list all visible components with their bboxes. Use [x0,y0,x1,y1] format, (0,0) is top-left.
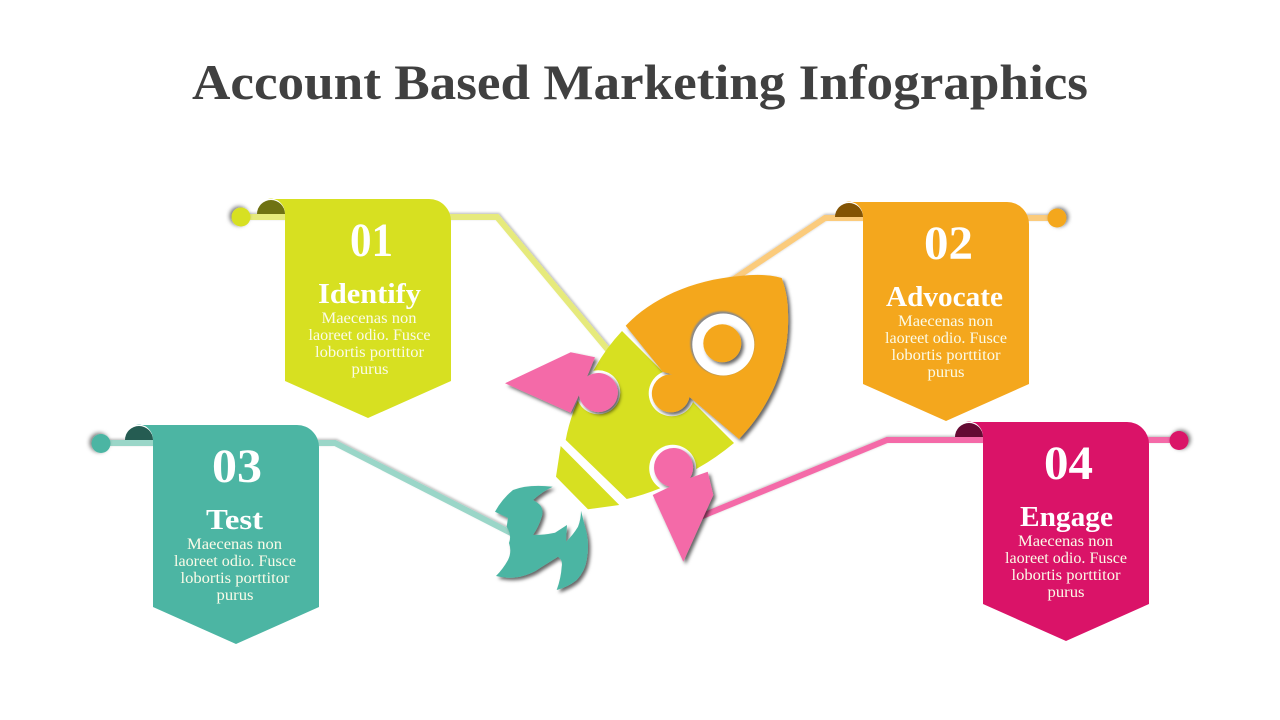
knob sockets [576,370,696,492]
window centre [703,324,741,362]
rocket lower strip [556,446,619,509]
number 01: 01 [350,214,393,267]
ribbon fold 02 [835,203,863,217]
panel: 03 Test [125,425,319,644]
ribbon fold 04 [955,423,983,437]
panel: 01 Identify [257,199,451,418]
heading Test: Test [206,504,263,536]
body text 01: Maecenas non [322,310,416,327]
body text 04 [1005,533,1127,601]
connector line 03 [101,443,515,535]
body text 01: laoreet odio. Fusce [308,327,430,344]
rocket body piece [566,331,734,499]
body text 04: purus [1048,584,1084,601]
number 02: 02 [924,217,973,270]
dot 02 [1048,208,1066,228]
window ring [690,311,754,376]
title: Account Based Marketing Infographics [192,54,1088,110]
heading Engage: Engage [1020,501,1113,533]
connector line 02 [728,218,1057,283]
ribbon fold 03 [125,426,153,440]
connector line 04 [695,440,1179,519]
body text 02: Maecenas non [898,313,993,330]
heading Advocate: Advocate [886,281,1003,313]
rocket nose piece [626,275,788,439]
panel: 02 Advocate [835,202,1029,421]
dot 03 [92,434,110,453]
number 03: 03 [212,440,262,493]
body text 03: laoreet odio. Fusce [174,553,296,570]
flame [495,486,588,590]
body text 01 [308,310,430,378]
ribbon 04 [966,422,1149,641]
body text 04: Maecenas non [1018,533,1113,550]
body text 03: purus [216,587,254,604]
dot 01 [232,208,250,226]
body text 02 [885,313,1007,381]
dot 04 [1170,431,1188,450]
connector line 01 [240,217,608,350]
number 04: 04 [1044,437,1093,490]
body text 02: laoreet odio. Fusce [885,330,1007,347]
icon: rocket puzzle [495,275,788,590]
ribbon fold 01 [257,200,285,214]
body text 01: lobortis porttitor [315,344,425,361]
bottom fin [653,448,713,562]
left fin [505,352,618,413]
ribbon 02 [846,202,1029,421]
body text 03: lobortis porttitor [180,570,290,587]
body text 03: Maecenas non [187,536,282,553]
body text 03 [174,536,296,604]
body text 01: purus [352,361,388,378]
ribbon 01 [268,199,451,418]
body text 04: lobortis porttitor [1012,567,1121,584]
ribbon 03 [136,425,319,644]
body text 04: laoreet odio. Fusce [1005,550,1127,567]
heading Identify: Identify [318,278,422,310]
panel: 04 Engage [955,422,1149,641]
body text 02: purus [928,364,964,381]
body text 02: lobortis porttitor [892,347,1001,364]
